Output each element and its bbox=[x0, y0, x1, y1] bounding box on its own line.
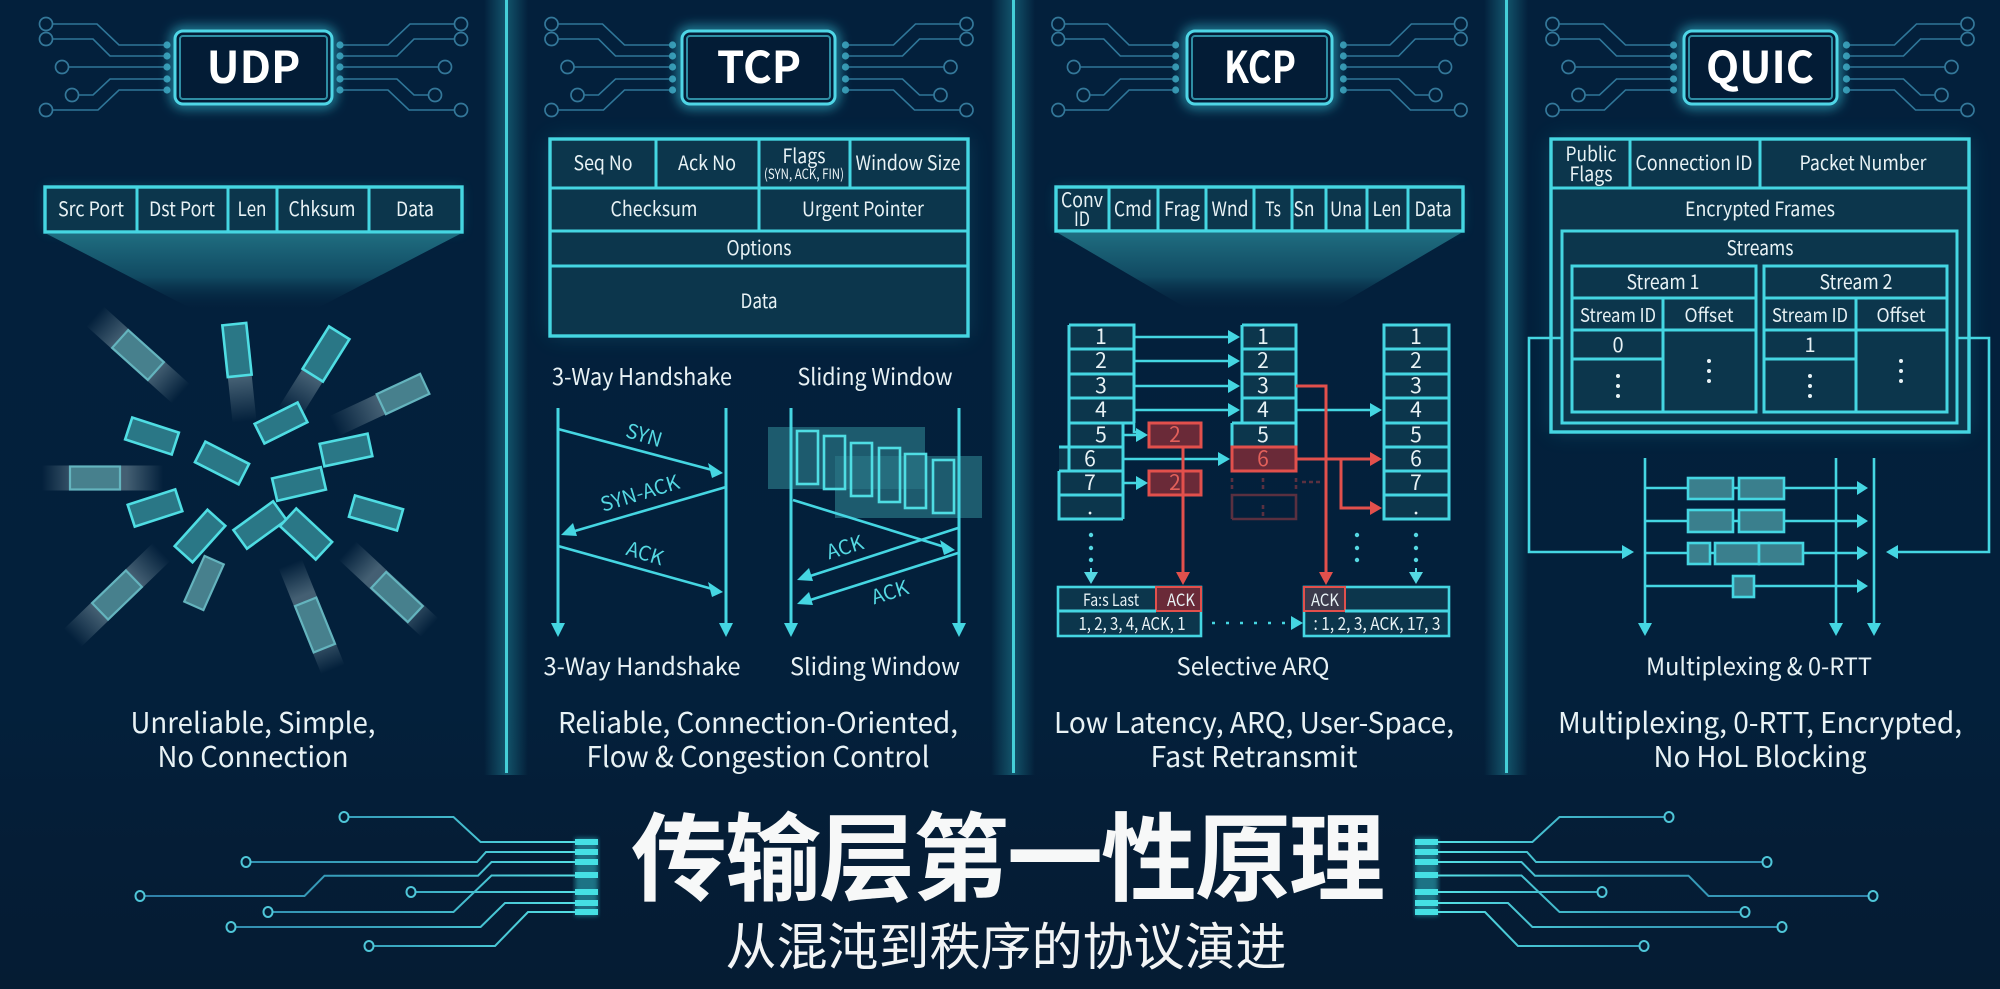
left ACK box: Fa:s Last bbox=[1083, 586, 1139, 611]
KCP header table: Sn bbox=[1294, 193, 1314, 222]
KCP header table: Cmd bbox=[1114, 193, 1152, 222]
KCP tagline: Fast Retransmit bbox=[1150, 735, 1358, 776]
KCP header table: Data bbox=[1414, 193, 1452, 222]
teal transfer arrows bbox=[1124, 330, 1382, 490]
UDP header table bbox=[45, 187, 462, 232]
diagram: 3-way handshake sequence: SYN-ACK bbox=[596, 466, 683, 518]
title: 传输层第一性原理 bbox=[631, 782, 1383, 921]
TCP header table: Checksum bbox=[610, 193, 698, 222]
left ACK box bbox=[1058, 586, 1201, 636]
diagram: delivered stack: 5 bbox=[1410, 419, 1422, 449]
caption: sliding window: Sliding Window bbox=[790, 647, 960, 682]
funnel below KCP header bbox=[1058, 233, 1461, 312]
diagram: receiver stack: 1 bbox=[1257, 321, 1269, 351]
TCP header table: Seq No bbox=[574, 147, 632, 176]
right ACK box: : 1, 2, 3, ACK, 17, 3 bbox=[1314, 610, 1440, 636]
diagram: 3-way handshake sequence: SYN bbox=[623, 415, 666, 453]
TCP header table: Urgent Pointer bbox=[802, 193, 924, 222]
KCP header table bbox=[1056, 184, 1463, 232]
diagram: sliding window: ACK bbox=[867, 571, 912, 610]
icon: KCP chip with circuit traces bbox=[1052, 18, 1467, 116]
UDP tagline: No Connection bbox=[158, 735, 348, 776]
KCP header table: Frag bbox=[1164, 193, 1200, 222]
QUIC packet structure: Public bbox=[1566, 138, 1616, 167]
TCP header table: Ack No bbox=[678, 147, 736, 176]
streams container: Stream 2 bbox=[1820, 266, 1892, 295]
UDP header table: Dst Port bbox=[149, 193, 215, 222]
diagram: delivered stack: 6 bbox=[1410, 443, 1422, 473]
QUIC packet structure: Flags bbox=[1570, 158, 1612, 187]
diagram: 3-way handshake sequence: ACK bbox=[623, 533, 668, 571]
left ACK box: ACK bbox=[1167, 586, 1195, 611]
KCP header table: Una bbox=[1330, 193, 1362, 222]
heading: sliding window: Sliding Window bbox=[798, 358, 952, 392]
streams container: Stream ID bbox=[1580, 301, 1656, 328]
red lost packets and retransmit lines: 2 bbox=[1169, 419, 1181, 449]
TCP tagline: Reliable, Connection-Oriented, bbox=[558, 701, 958, 742]
UDP header table: Len bbox=[238, 193, 266, 222]
diagram: sliding window bbox=[768, 408, 982, 637]
diagram: receiver stack: 2 bbox=[1257, 345, 1269, 375]
diagram: delivered stack: 4 bbox=[1410, 394, 1422, 424]
TCP header table bbox=[550, 139, 968, 336]
KCP header table: Conv bbox=[1061, 184, 1104, 213]
diagram: receiver stack: 5 bbox=[1257, 419, 1269, 449]
panel: TCP bbox=[544, 18, 982, 776]
diagram: sender stack: 2 bbox=[1095, 345, 1107, 375]
streams container: Streams bbox=[1726, 232, 1794, 261]
TCP header table: (SYN, ACK, FIN) bbox=[764, 164, 844, 184]
diagram: delivered stack: 2 bbox=[1410, 345, 1422, 375]
streams container: Stream ID bbox=[1772, 301, 1848, 328]
icon: UDP chip with circuit traces bbox=[40, 18, 468, 116]
TCP header table: Data bbox=[740, 285, 778, 314]
diagram: delivered stack: 7 bbox=[1410, 467, 1422, 497]
streams container bbox=[1562, 231, 1957, 423]
icon: QUIC chip with circuit traces bbox=[1546, 18, 1974, 116]
red lost packets and retransmit lines: 2 bbox=[1169, 467, 1181, 497]
panel: KCP bbox=[1052, 18, 1467, 776]
right connector arrow bbox=[1886, 338, 1989, 559]
UDP header table: Src Port bbox=[58, 193, 124, 222]
KCP tagline: Low Latency, ARQ, User-Space, bbox=[1054, 701, 1454, 742]
streams container: Offset bbox=[1684, 301, 1734, 328]
streams container: 0 bbox=[1612, 329, 1624, 358]
KCP header table: Wnd bbox=[1212, 193, 1248, 222]
QUIC tagline: No HoL Blocking bbox=[1654, 735, 1866, 776]
right ACK box: ACK bbox=[1311, 586, 1339, 611]
TCP header table: Options bbox=[726, 232, 792, 261]
streams container: 1 bbox=[1804, 329, 1816, 358]
icon: TCP chip with circuit traces bbox=[545, 18, 973, 116]
diagram: receiver stack bbox=[1232, 321, 1322, 519]
streams container: Offset bbox=[1876, 301, 1926, 328]
QUIC packet structure bbox=[1551, 138, 1969, 432]
red lost packets and retransmit lines bbox=[1149, 386, 1382, 585]
subtitle: 从混沌到秩序的协议演进 bbox=[725, 906, 1287, 980]
diagram: sender stack bbox=[1059, 321, 1134, 521]
left ACK box: 1, 2, 3, 4, ACK, 1 bbox=[1078, 610, 1186, 636]
TCP header table: Flags bbox=[782, 140, 826, 169]
TCP tagline: Flow & Congestion Control bbox=[586, 735, 930, 776]
diagram: sender stack: 3 bbox=[1095, 370, 1107, 400]
caption: 3-way handshake: 3-Way Handshake bbox=[544, 647, 740, 682]
chart: scattered UDP packets bbox=[42, 307, 438, 674]
divider glows between panels bbox=[484, 0, 1528, 775]
diagram: sliding window: ACK bbox=[822, 526, 867, 565]
right ACK box bbox=[1304, 586, 1449, 636]
left connector arrow bbox=[1529, 338, 1634, 559]
TCP tagline bbox=[558, 701, 958, 776]
funnel below UDP header bbox=[47, 234, 460, 312]
diagram: delivered stack bbox=[1384, 321, 1449, 521]
KCP tagline bbox=[1054, 701, 1454, 776]
diagram: delivered stack: 1 bbox=[1410, 321, 1422, 351]
streams container: Stream 1 bbox=[1626, 266, 1700, 295]
UDP header table: Data bbox=[396, 193, 434, 222]
KCP header table: ID bbox=[1074, 203, 1090, 232]
QUIC packet structure: Connection ID bbox=[1636, 147, 1752, 176]
diagram: sender stack: 4 bbox=[1095, 394, 1107, 424]
icon: TCP chip with circuit traces: TCP bbox=[717, 32, 801, 96]
diagram: receiver stack: 4 bbox=[1257, 394, 1269, 424]
diagram: 3-way handshake sequence bbox=[551, 408, 733, 637]
QUIC tagline: Multiplexing, 0-RTT, Encrypted, bbox=[1558, 701, 1962, 742]
dashed link arrow bbox=[1212, 616, 1303, 630]
QUIC tagline bbox=[1558, 701, 1962, 776]
icon: KCP chip with circuit traces: KCP bbox=[1224, 32, 1296, 96]
caption: multiplexing: Multiplexing & 0-RTT bbox=[1646, 647, 1872, 682]
right title circuit bbox=[1415, 812, 1878, 951]
diagram: multiplexed streams bbox=[1638, 458, 1881, 636]
QUIC packet structure: Packet Number bbox=[1800, 147, 1927, 176]
vertical dots with arrows bbox=[1084, 533, 1423, 584]
diagram: sender stack: 6 bbox=[1084, 443, 1096, 473]
KCP header table: Ts bbox=[1265, 193, 1281, 222]
left title circuit bbox=[136, 812, 598, 951]
diagram: sender stack: . bbox=[1087, 491, 1093, 521]
heading: 3-way handshake: 3-Way Handshake bbox=[552, 358, 732, 392]
diagram: sender stack: 1 bbox=[1095, 321, 1107, 351]
UDP header table: Chksum bbox=[288, 193, 356, 222]
TCP header table: Window Size bbox=[856, 147, 960, 176]
diagram: delivered stack: . bbox=[1413, 491, 1419, 521]
diagram: receiver stack: 6 bbox=[1257, 443, 1269, 473]
diagram: delivered stack: 3 bbox=[1410, 370, 1422, 400]
icon: UDP chip with circuit traces: UDP bbox=[207, 32, 300, 96]
diagram: receiver stack: 3 bbox=[1257, 370, 1269, 400]
UDP tagline bbox=[130, 701, 376, 776]
icon: QUIC chip with circuit traces: QUIC bbox=[1706, 32, 1814, 96]
UDP tagline: Unreliable, Simple, bbox=[130, 701, 376, 742]
QUIC packet structure: Encrypted Frames bbox=[1685, 193, 1835, 222]
diagram: sender stack: 7 bbox=[1084, 467, 1096, 497]
panel: QUIC bbox=[1529, 18, 1989, 776]
panel: UDP bbox=[40, 18, 468, 776]
caption: selective ARQ: Selective ARQ bbox=[1176, 647, 1330, 682]
KCP header table: Len bbox=[1372, 193, 1402, 222]
diagram: sender stack: 5 bbox=[1095, 419, 1107, 449]
